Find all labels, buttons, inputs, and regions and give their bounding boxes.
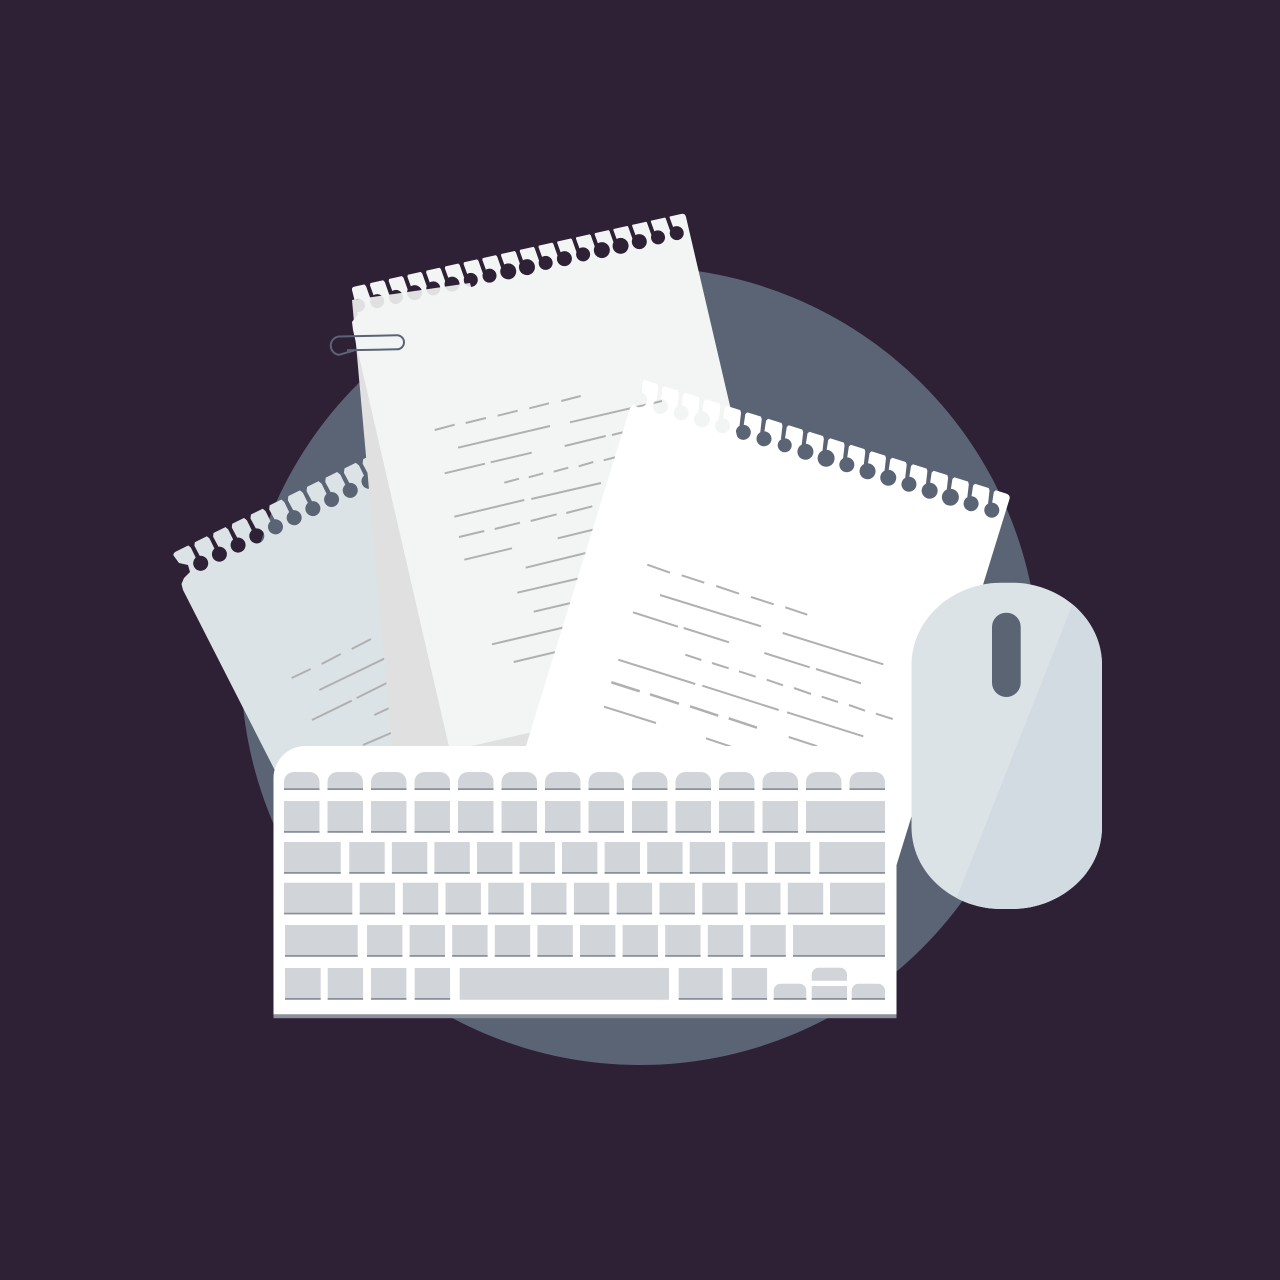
middle sheet fold shadow [352,283,600,746]
front sheet text lines [604,565,893,748]
key row 6 with space bar and arrow keys [285,968,885,1000]
mouse shaded side [956,604,1102,909]
front notepad sheet [510,380,1010,870]
left notepad sheet [173,458,392,770]
left sheet paper [173,458,392,770]
middle sheet text lines [435,396,662,662]
keyboard [274,746,896,1018]
paper clip [331,335,404,355]
key row 2 [284,801,885,833]
keyboard body [274,746,896,1014]
key row 5 [285,925,885,957]
left sheet text lines [292,639,392,745]
backdrop circle [241,267,1039,1065]
middle notepad sheet [352,214,738,746]
key row 1 [284,772,885,790]
key row 4 [284,883,885,914]
mouse scroll wheel [992,613,1021,697]
key row 3 [284,842,885,874]
mouse body [912,583,1102,909]
mouse [912,583,1110,920]
front sheet paper [510,380,1010,870]
middle sheet paper [352,214,738,746]
keyboard base edge [274,1010,896,1018]
